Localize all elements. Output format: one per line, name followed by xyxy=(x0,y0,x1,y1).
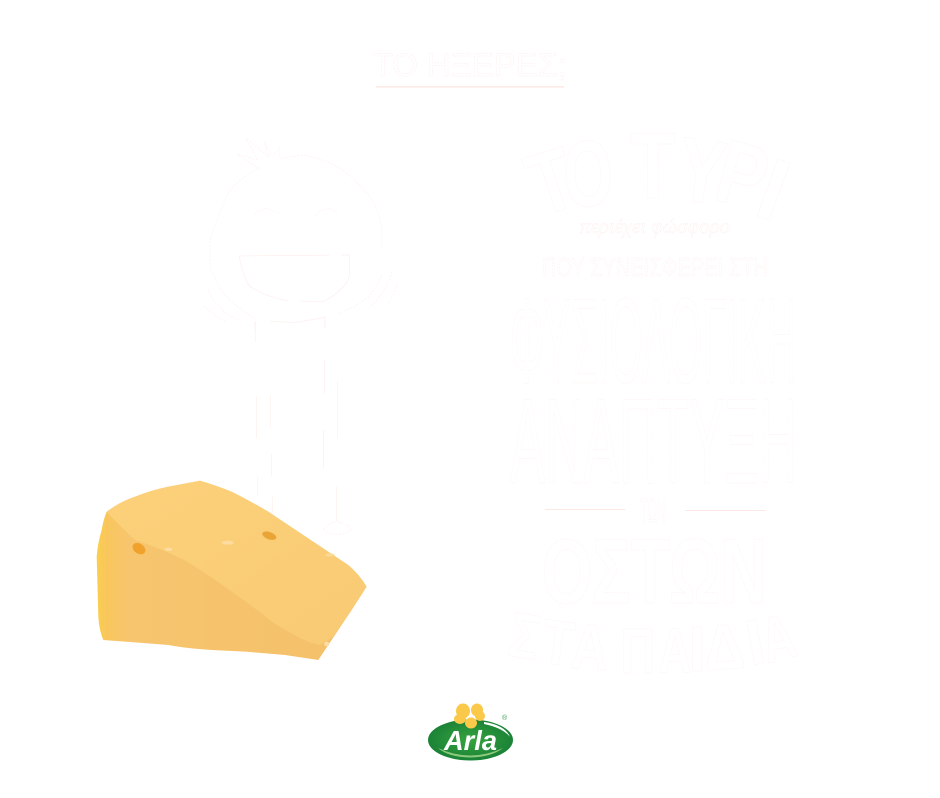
laughing mouth xyxy=(239,255,349,302)
text: of the, with rules: ΤΩΝ xyxy=(640,492,666,529)
heading: the cheese, arced letters: Τ xyxy=(515,129,588,236)
heading: the cheese, arced letters: Τ xyxy=(630,114,676,219)
heading: the cheese, arced letters xyxy=(515,114,802,240)
cheese top face xyxy=(107,481,367,645)
collar xyxy=(255,317,325,330)
heading: in children, arced letters xyxy=(504,599,803,687)
hair xyxy=(237,137,280,168)
heading: in children, arced letters: Π xyxy=(621,615,655,687)
logo oval xyxy=(428,720,513,760)
heading: in children, arced letters: Δ xyxy=(701,609,747,684)
text: contains phosphorus: περιέχει φώσφορο xyxy=(580,216,730,238)
shake marks xyxy=(204,272,397,322)
heading: did you know: ΤΟ ΗΞΕΡΕΣ; xyxy=(373,47,567,83)
logo flower xyxy=(454,704,485,728)
cheese holes xyxy=(130,530,335,646)
text: which contributes to: ΠΟΥ ΣΥΝΕΙΣΦΕΡΕΙ ΣΤΗ xyxy=(542,252,768,282)
heading: in children, arced letters: Α xyxy=(754,600,803,677)
logo wordmark: Arla xyxy=(443,725,497,756)
child body xyxy=(255,320,352,534)
child head xyxy=(204,137,397,330)
heading: the cheese, arced letters: Υ xyxy=(671,119,732,225)
illustration: laughing child xyxy=(204,137,397,534)
heading: in children, arced letters: Τ xyxy=(537,607,578,681)
eyes xyxy=(255,209,338,215)
heading: the cheese, arced letters: Ο xyxy=(561,121,615,228)
heading: the cheese, arced letters: Ρ xyxy=(706,121,779,230)
heading: bones: ΟΣΤΩΝ xyxy=(542,521,767,623)
illustration: cheese wedge xyxy=(97,481,367,660)
heading: in children, arced letters: Ι xyxy=(740,605,770,679)
registered mark: ® xyxy=(502,714,508,722)
heading: in children, arced letters: Σ xyxy=(504,599,546,675)
heading: the cheese, arced letters: Ι xyxy=(745,139,802,240)
heading: in children, arced letters: Ι xyxy=(688,613,706,685)
heading: in children, arced letters: Α xyxy=(569,611,611,685)
cheese front face xyxy=(97,512,367,660)
logo: Arla xyxy=(428,704,513,760)
heading: in children, arced letters: Α xyxy=(658,616,692,687)
